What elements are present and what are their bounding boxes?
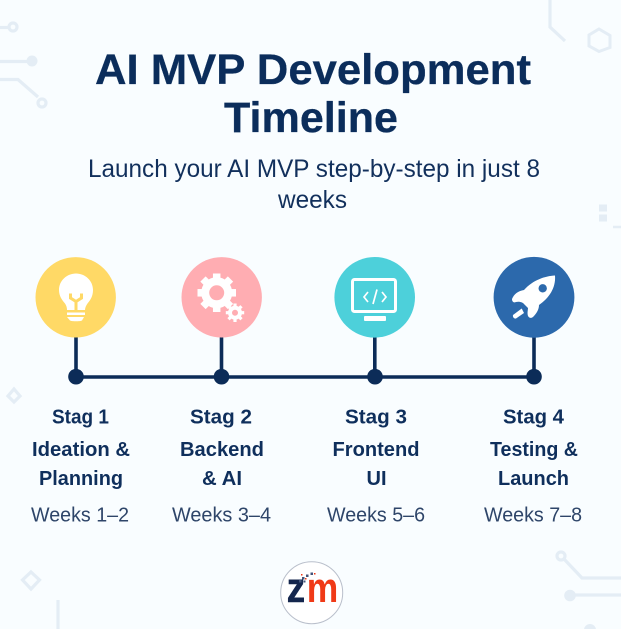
stage 1 text: Planning — [39, 468, 123, 490]
stage 3 text: Weeks 5–6 — [327, 504, 425, 526]
icon: light bulb — [35, 257, 116, 337]
subtitle: weeks — [277, 186, 347, 214]
title: AI MVP Development — [95, 46, 531, 94]
stage 2 text: Stag 2 — [190, 406, 252, 428]
stage 4 text: Launch — [498, 468, 569, 490]
icon: rocket — [494, 257, 574, 338]
logo: m — [307, 564, 338, 611]
stage 3 text: Frontend — [332, 439, 420, 461]
logo — [281, 562, 343, 624]
stage 1 text: Stag 1 — [52, 406, 109, 428]
stage 2 text: & AI — [202, 468, 242, 490]
icon: code monitor — [334, 257, 415, 338]
stage 2 text — [172, 406, 271, 526]
stage 1 text — [31, 406, 130, 526]
title — [95, 46, 531, 142]
stage 4 text: Stag 4 — [503, 406, 565, 428]
stage 3 text — [327, 406, 425, 526]
subtitle: Launch your AI MVP step-by-step in just 8 — [88, 155, 540, 183]
icon: gears — [182, 257, 262, 337]
timeline — [68, 337, 542, 385]
stage 3 text: UI — [366, 468, 386, 490]
stage 3 text: Stag 3 — [345, 406, 407, 428]
subtitle — [88, 155, 540, 214]
stage 2 text: Backend — [180, 439, 264, 461]
stage 1 text: Ideation & — [32, 439, 130, 461]
title: Timeline — [224, 94, 398, 142]
stage 4 text: Weeks 7–8 — [484, 504, 582, 526]
stage 2 text: Weeks 3–4 — [172, 504, 271, 526]
logo: z — [287, 564, 305, 611]
stage 4 text — [484, 406, 582, 526]
stage 4 text: Testing & — [490, 439, 578, 461]
stage 1 text: Weeks 1–2 — [31, 504, 129, 526]
